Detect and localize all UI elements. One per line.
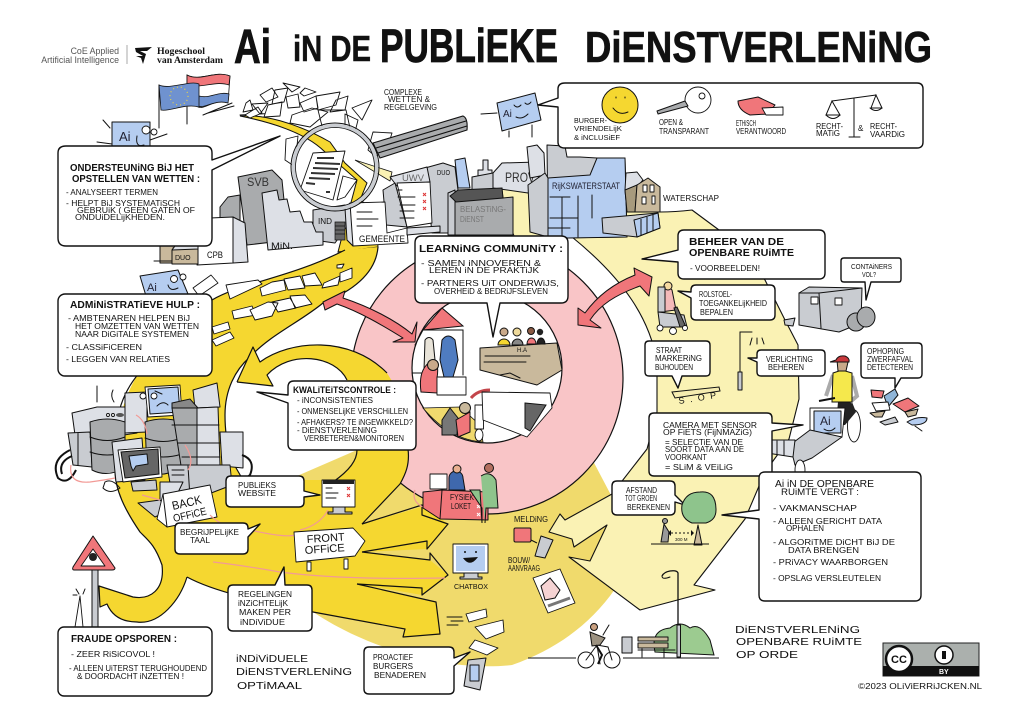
government buildings: DUO — [175, 255, 191, 262]
government buildings — [154, 145, 660, 265]
callout: publieks website — [226, 476, 320, 507]
icon: tree and walker with 300m distance: 300 M — [675, 537, 688, 542]
sign: back office: BACK — [171, 493, 203, 513]
panel: ai in de openbare ruimte vergt: Ai iN DE OPENBARE — [775, 478, 874, 490]
icon: cyclist with AI camera: Ai — [820, 414, 831, 428]
panel: burgervriendelijk criteria: & — [858, 124, 864, 133]
title: iN DE — [293, 28, 371, 69]
panel: administratieve hulp: - CLASSiFiCEREN — [66, 343, 142, 352]
panel: learning community — [415, 236, 568, 337]
callout: rolstoel: ROLSTOEL- — [699, 290, 732, 299]
sign: front office: FRONT — [306, 531, 345, 546]
panel: burgervriendelijk criteria: OPEN & — [659, 118, 684, 127]
callout: proactief burgers benaderen: PROACTiEF — [373, 653, 413, 662]
callout: rolstoel — [678, 285, 775, 320]
callout: straatmarkering bijhouden: MARKERiNG — [655, 354, 702, 363]
panel: burgervriendelijk criteria: MATiG — [816, 129, 840, 138]
panel: kwaliteitscontrole — [257, 381, 416, 450]
callout: ophoping zwerfafval: DETECTEREN — [867, 363, 913, 372]
government buildings: SVB — [247, 175, 269, 189]
licence badge: CC BY — [883, 643, 979, 676]
panel: ai in de openbare ruimte vergt: - OPSLAG VERSLEUTELEN — [773, 574, 881, 583]
callout: camera met sensor op fiets: = SLiM & VEiLiG — [665, 463, 733, 472]
melding: phone and message: MELDiNG — [514, 515, 548, 524]
panel: learning community: - PARTNERS UiT ONDERWiJS, — [421, 279, 559, 288]
arrow outline — [237, 345, 408, 524]
callout: camera met sensor op fiets — [649, 413, 803, 476]
logo: CoE Applied AI and Hogeschool van Amsterdam: Artificial Intelligence — [41, 55, 119, 65]
red arrow: left to learning community — [323, 291, 417, 342]
icon: litter pile — [870, 389, 927, 431]
sign: back office: OFFiCE — [172, 506, 208, 525]
melding: phone and message — [514, 515, 553, 558]
callout: containers vol — [841, 258, 901, 300]
callout: publieks website: WEBSiTE — [238, 489, 276, 498]
logo: CoE Applied AI and Hogeschool van Amsterdam: Hogeschool — [157, 47, 205, 57]
callout: ophoping zwerfafval: ZWERFAFVAL — [867, 355, 913, 364]
panel: ai in de openbare ruimte vergt — [722, 472, 921, 601]
callout: rolstoel: BEPALEN — [700, 308, 733, 317]
callout: straatmarkering bijhouden: STRAAT — [656, 346, 682, 355]
government buildings: RijKSWATERSTAAT — [552, 181, 620, 192]
heading: dienstverlening openbare ruimte op orde: OPENBARE RUiMTE — [736, 636, 862, 648]
magnifying glass lens with document — [291, 123, 379, 211]
callout: proactief burgers benaderen: BENADEREN — [374, 671, 426, 680]
callout: begrijpelijke taal — [175, 523, 260, 554]
panel: learning community: OVERHEiD & BEDRiJFSLEVEN — [434, 287, 548, 296]
panel: burgervriendelijk criteria: RECHT- — [870, 122, 897, 131]
panel: ondersteuning bij het opstellen van wetten: ONDERSTEUNiNG BiJ HET — [70, 162, 195, 174]
panel: learning community: LEREN iN DE PRAKTiJK — [429, 266, 540, 275]
callout: afstand tot groen: BEREKENEN — [627, 503, 670, 512]
fysiek loket — [423, 464, 498, 523]
label: waterschap: WATERSCHAP — [663, 194, 719, 203]
panel: burgervriendelijk criteria: ETHiSCH — [736, 119, 756, 128]
licence badge: CC BY: CC — [891, 654, 907, 666]
AI robot: administratieve hulp: Ai — [147, 282, 157, 294]
panel: burgervriendelijk criteria: VAARDiG — [870, 130, 905, 139]
callout: containers vol: VOL? — [862, 272, 876, 279]
icon: monitor publieks website — [322, 480, 355, 514]
panel: fraude opsporen — [58, 627, 212, 696]
ribbon outline — [99, 247, 378, 622]
panel: burgervriendelijk criteria: VERANTWOORD — [736, 127, 786, 136]
panel: administratieve hulp: HET OMZETTEN VAN WETTEN — [75, 322, 199, 331]
panel: administratieve hulp: ADMiNiSTRATiEVE HULP : — [70, 299, 200, 311]
callout: ophoping zwerfafval — [861, 343, 922, 388]
panel: fraude opsporen: - ALLEEN UiTERST TERUGHOUDEND — [69, 664, 207, 673]
central circle: meeting scene: H.A — [517, 348, 527, 354]
AI robot: ondersteuning: Ai — [119, 129, 131, 144]
heading: individuele dienstverlening optimaal — [236, 653, 352, 692]
server room: back office — [56, 383, 252, 517]
panel: fraude opsporen: - ZEER RiSiCOVOL ! — [71, 650, 155, 659]
sign: back office — [157, 485, 217, 527]
icon: stop street marking: S.OP — [678, 390, 717, 406]
panel: kwaliteitscontrole: - iNCONSiSTENTiES — [297, 396, 373, 405]
callout: straatmarkering bijhouden — [645, 341, 710, 388]
sign: front office — [294, 528, 365, 571]
chatbox monitor — [453, 544, 488, 591]
callout: verlichting beheren: BEHEREN — [768, 363, 804, 372]
chatbox monitor: CHATBOX — [454, 584, 488, 591]
folders moving along the ribbon — [212, 264, 352, 346]
arrow: quality control loop back — [237, 345, 416, 524]
panel: fraude opsporen: & DOORDACHT iNZETTEN ! — [77, 672, 184, 681]
mustard disc: individuele dienstverlening — [297, 440, 615, 666]
heading: dienstverlening openbare ruimte op orde: OP ORDE — [736, 649, 798, 661]
logo: CoE Applied AI and Hogeschool van Amsterdam: van Amsterdam — [157, 56, 223, 66]
government buildings: IND — [318, 216, 332, 226]
panel: kwaliteitscontrole: - DiENSTVERLENiNG — [297, 426, 377, 435]
icon: cyclist with AI camera — [751, 356, 860, 480]
icon: containers and bin bags — [784, 287, 875, 332]
icon: stop street marking — [672, 387, 720, 406]
panel: fraude opsporen: FRAUDE OPSPOREN : — [71, 633, 177, 645]
logo: CoE Applied AI and Hogeschool van Amsterdam — [41, 45, 223, 66]
title: Ai — [234, 21, 271, 74]
bouwaanvraag document: AANVRAAG — [508, 564, 540, 573]
label: complexe wetten en regelgeving — [384, 88, 437, 112]
panel: burgervriendelijk criteria: VRIENDELijK — [574, 124, 622, 133]
panel: burgervriendelijk criteria — [538, 83, 923, 148]
callout: camera met sensor op fiets: OP FiETS (FijNMAZiG) — [663, 428, 752, 437]
panel: administratieve hulp: - LEGGEN VAN RELATiES — [66, 355, 170, 364]
panel: kwaliteitscontrole: VERBETEREN&MONiTOREN — [304, 434, 404, 443]
yellow ribbon main band and left C — [99, 247, 448, 637]
panel: kwaliteitscontrole: - ONMENSELijKE VERSCHiLLEN — [297, 407, 408, 416]
callout: ophoping zwerfafval: OPHOPiNG — [867, 347, 904, 356]
panel: administratieve hulp: NAAR DiGiTALE SYSTEMEN — [75, 330, 189, 339]
callout: rolstoel: TOEGANKELijKHEID — [699, 299, 767, 308]
panel: beheer van de openbare ruimte — [642, 230, 825, 279]
government buildings: ABP — [164, 230, 179, 239]
bouwaanvraag document — [508, 556, 575, 613]
credit: copyright: ©2023 OLiViERRiJCKEN.NL — [858, 682, 983, 691]
panel: burgervriendelijk criteria: RECHT- — [816, 122, 843, 131]
panel: ondersteuning bij het opstellen van wetten: - ANALYSEERT TERMEN — [66, 188, 158, 197]
callout: publieks website: PUBLiEKS — [238, 481, 276, 490]
panel: burgervriendelijk criteria: & iNCLUSiEF — [574, 133, 620, 142]
government buildings: CPB — [207, 250, 223, 260]
yellow ribbon tip from the laws — [240, 116, 378, 252]
heading: individuele dienstverlening optimaal: DiENSTVERLENiNG — [236, 666, 352, 678]
licence badge: CC BY: BY — [939, 669, 949, 676]
title: PUBLiEKE — [380, 19, 558, 72]
pink data lines — [142, 490, 445, 578]
heading: dienstverlening openbare ruimte op orde — [735, 624, 862, 661]
magnifying glass handle — [373, 116, 467, 158]
heading: individuele dienstverlening optimaal: iNDiViDUELE — [236, 653, 308, 665]
pink ring — [351, 242, 623, 514]
panel: beheer van de openbare ruimte: - VOORBEELDEN! — [690, 264, 760, 273]
callout: verlichting beheren — [748, 350, 825, 376]
callout: camera met sensor op fiets: VOORKANT — [665, 453, 707, 462]
callout: regelingen inzichtelijk maken: MAKEN PER — [239, 608, 291, 617]
callout: begrijpelijke taal: TAAL — [190, 536, 211, 545]
government buildings: MiN. — [271, 241, 293, 251]
panel: ai in de openbare ruimte vergt: - ALGORiTME DiCHT BiJ DE — [773, 538, 895, 547]
scene: cyclist, bin, bench and shrubs — [528, 571, 719, 668]
title: DiENSTVERLENiNG — [585, 23, 932, 72]
heading: individuele dienstverlening optimaal: OPTiMAAL — [237, 680, 302, 692]
fysiek loket: FYSiEK — [450, 493, 475, 502]
AI robot: ondersteuning — [97, 120, 168, 156]
panel: ondersteuning bij het opstellen van wetten: GEBRUiK ( GEEN GATEN OF — [77, 206, 195, 215]
label: complexe wetten en regelgeving: REGELGEViNG — [384, 103, 437, 112]
government buildings: DiENST — [460, 214, 484, 224]
panel: ai in de openbare ruimte vergt: - ALLEEN GERiCHT DATA — [773, 517, 883, 526]
arrows to front-office channels outline — [313, 505, 448, 637]
AI robot: administratieve hulp — [140, 270, 218, 296]
panel: ondersteuning bij het opstellen van wetten: OPSTELLEN VAN WETTEN : — [72, 173, 200, 185]
title — [234, 19, 932, 74]
panel: kwaliteitscontrole: - AFHAKERS? TE iNGEWiKKELD? — [297, 418, 414, 427]
panel: burgervriendelijk criteria: BURGER- — [574, 116, 607, 125]
central circle: meeting scene — [412, 308, 562, 442]
callout: begrijpelijke taal: BEGRiJPELijKE — [180, 528, 239, 537]
pale yellow ring: openbare ruimte — [549, 205, 799, 610]
panel: ai in de openbare ruimte vergt: DATA BRENGEN — [788, 546, 859, 555]
panel: ondersteuning bij het opstellen van wetten: ONDUiDELijKHEDEN. — [75, 213, 165, 222]
icon: street lamp — [738, 332, 764, 390]
icon: wheelchair user — [657, 282, 688, 334]
callout: afstand tot groen — [612, 481, 685, 515]
callout: camera met sensor op fiets: CAMERA MET SENSOR — [663, 421, 757, 430]
callout: camera met sensor op fiets: SOORT DATA AAN DE — [665, 445, 744, 454]
callout: regelingen inzichtelijk maken: REGELiNGEN — [238, 590, 292, 599]
callout: regelingen inzichtelijk maken: iNDiViDUE — [240, 618, 285, 627]
panel: administratieve hulp: - AMBTENAREN HELPEN BiJ — [68, 314, 190, 323]
panel: ai in de openbare ruimte vergt: - PRiVACY WAARBORGEN — [773, 558, 888, 567]
flags: EU and Netherlands — [159, 74, 230, 128]
flying papers: complex laws — [203, 83, 392, 166]
panel: beheer van de openbare ruimte: OPENBARE RUiMTE — [689, 247, 794, 259]
callout: containers vol: CONTAiNERS — [851, 264, 892, 271]
panel: ai in de openbare ruimte vergt: OPHALEN — [786, 524, 824, 533]
callout: proactief burgers benaderen — [364, 647, 470, 694]
panel: kwaliteitscontrole: KWALiTEiTSCONTROLE : — [293, 385, 396, 396]
red double arrow: right to openbare ruimte — [578, 268, 652, 328]
sign: front office: OFFiCE — [304, 542, 345, 557]
panel: administratieve hulp — [58, 294, 212, 376]
icon: tree and walker with 300m distance — [651, 492, 716, 545]
white inner circle — [412, 293, 562, 443]
government buildings: DUO — [437, 168, 450, 177]
panel: learning community: - SAMEN iNNOVEREN & — [421, 259, 542, 268]
label: complexe wetten en regelgeving: COMPLEXE — [384, 88, 422, 97]
label: complexe wetten en regelgeving: WETTEN & — [388, 95, 431, 104]
callout: afstand tot groen: AFSTAND — [626, 486, 657, 495]
panel: ondersteuning bij het opstellen van wetten: - HELPT BiJ SYSTEMATiSCH — [66, 199, 180, 208]
panel: ondersteuning bij het opstellen van wetten — [58, 136, 280, 246]
callout: verlichting beheren: VERLiCHTiNG — [766, 355, 813, 364]
panel: learning community: LEARNiNG COMMUNiTY : — [419, 243, 563, 255]
callout: proactief burgers benaderen: BURGERS — [373, 662, 413, 671]
AI robot: waarden: Ai — [503, 109, 512, 120]
logo: CoE Applied AI and Hogeschool van Amsterdam: CoE Applied — [71, 46, 119, 56]
government buildings: PROV — [505, 169, 535, 185]
government buildings: BELASTiNG- — [460, 204, 506, 214]
panel: beheer van de openbare ruimte: BEHEER VAN DE — [689, 236, 784, 248]
panel: burgervriendelijk criteria: TRANSPARANT — [659, 127, 709, 136]
callout: regelingen inzichtelijk maken — [228, 567, 312, 631]
callout: afstand tot groen: TOT GROEN — [625, 494, 657, 503]
callout: regelingen inzichtelijk maken: iNZiCHTELijK — [238, 599, 289, 608]
government buildings: UWV — [402, 173, 424, 183]
pale yellow behind buildings — [355, 160, 545, 238]
fysiek loket: LOKET — [451, 502, 471, 511]
government buildings: GEMEENTE — [359, 234, 405, 244]
panel: ai in de openbare ruimte vergt: - VAKMANSCHAP — [773, 504, 857, 513]
callout: camera met sensor op fiets: = SELECTiE VAN DE — [665, 438, 743, 447]
bouwaanvraag document: BOUW/ — [508, 556, 531, 565]
warning sign: fraude — [73, 536, 115, 628]
panel: ai in de openbare ruimte vergt: RUiMTE VERGT : — [781, 487, 859, 498]
envelopes and phone: proactief benaderen — [447, 609, 504, 690]
heading: dienstverlening openbare ruimte op orde: DiENSTVERLENiNG — [735, 624, 860, 636]
AI robot: waarden — [481, 93, 541, 137]
callout: straatmarkering bijhouden: BiJHOUDEN — [655, 363, 693, 372]
